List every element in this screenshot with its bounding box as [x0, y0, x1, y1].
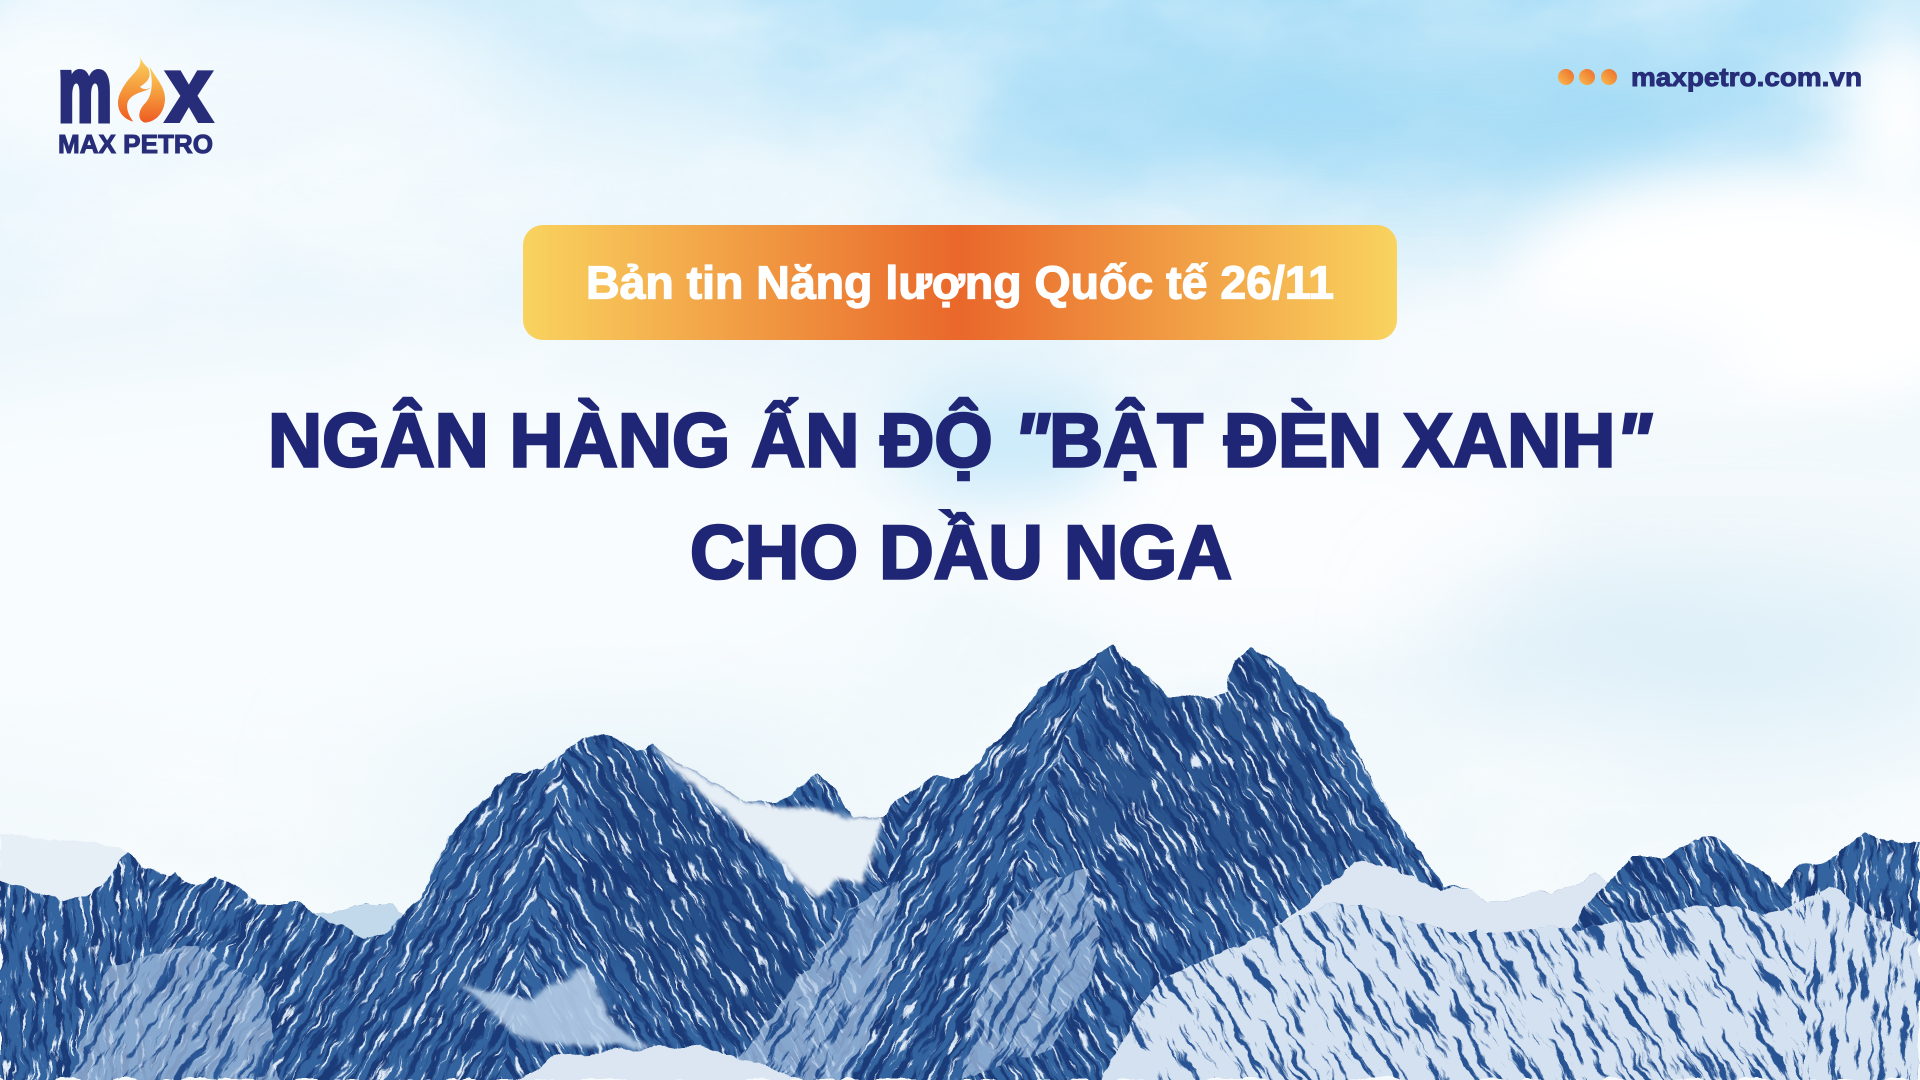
lower centre snow lump: [520, 1045, 800, 1080]
central pale slope under left peak: [459, 967, 650, 1050]
distant pale peak: [312, 905, 404, 938]
logo wordmark x: x: [166, 39, 212, 141]
snow col between peaks: [652, 743, 882, 897]
dark shading on steep faces: [590, 740, 810, 1050]
rock texture on right-facing slopes: [500, 644, 1792, 1080]
rock texture at frame edges: [0, 834, 1920, 1080]
banner pill: [523, 225, 1397, 340]
date banner: [523, 225, 1397, 340]
main rocky massif: [0, 630, 1920, 1080]
rock texture on left-facing slopes: [148, 652, 1100, 1080]
title: NGÂN HÀNG ẤN ĐỘ "BẬT ĐÈN XANH": [268, 398, 1652, 484]
icon: flame: [118, 57, 165, 123]
logo wordmark m: m: [58, 39, 112, 141]
mountain range: [0, 630, 1920, 1080]
banner text: Bản tin Năng lượng Quốc tế 26/11: [586, 256, 1334, 308]
title: [268, 398, 1652, 596]
snowy back ridge: [1278, 863, 1609, 933]
rock base: [0, 630, 1920, 1080]
website badge: [1558, 62, 1862, 92]
title: CHO DẦU NGA: [690, 511, 1232, 596]
left snowfield: [0, 835, 150, 925]
logo name: MAX PETRO: [58, 129, 213, 159]
icon: three orange dots: [1558, 69, 1617, 85]
snowy patches on the lower slopes: [70, 868, 1100, 1080]
logo: Max Petro: [58, 39, 213, 159]
website address: maxpetro.com.vn: [1631, 62, 1862, 92]
snowy foreground ridge: [1102, 886, 1920, 1080]
